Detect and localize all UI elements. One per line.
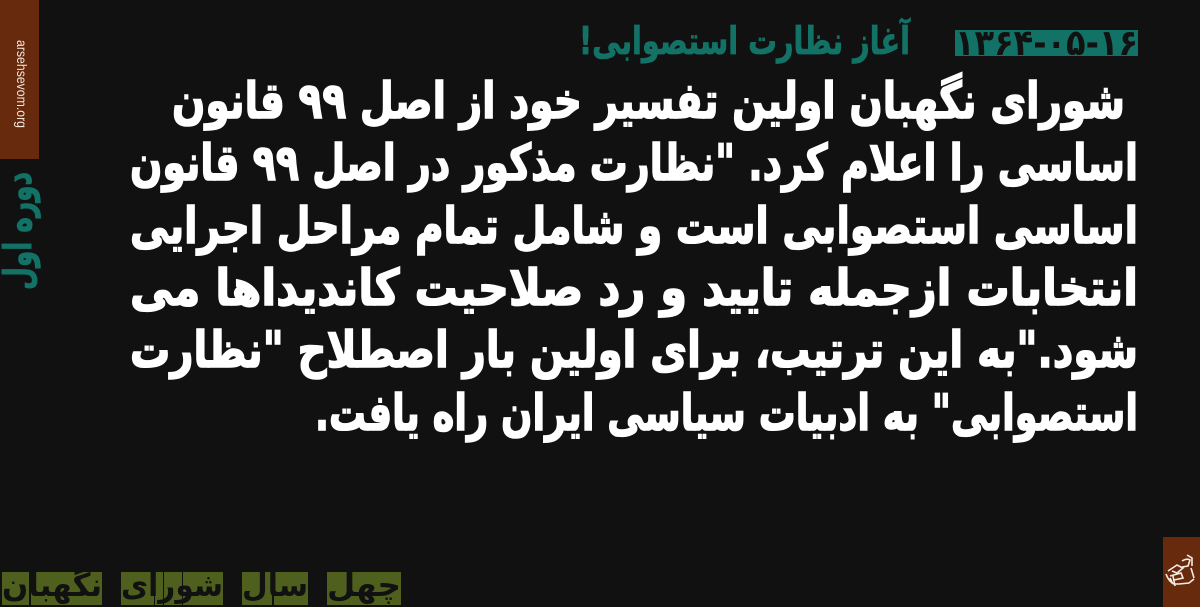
corner logo <box>1163 537 1200 607</box>
body text block <box>130 72 1138 443</box>
sidebar tab: website: arsehsevom.org <box>14 40 30 128</box>
heading: آغاز نظارت استصوابی! <box>579 17 911 63</box>
date badge: ۱۳۶۴-۰۵-۱۶ <box>955 23 1138 64</box>
footer title: forty years of the Guardian Council <box>2 566 401 605</box>
sidebar tab: website <box>0 0 39 159</box>
footer title: forty years of the Guardian Council: شورای <box>121 566 223 604</box>
footer title: forty years of the Guardian Council: چهل <box>327 566 401 604</box>
footer title: forty years of the Guardian Council: سال <box>242 566 308 604</box>
footer title: forty years of the Guardian Council: نگهبان <box>2 566 102 604</box>
